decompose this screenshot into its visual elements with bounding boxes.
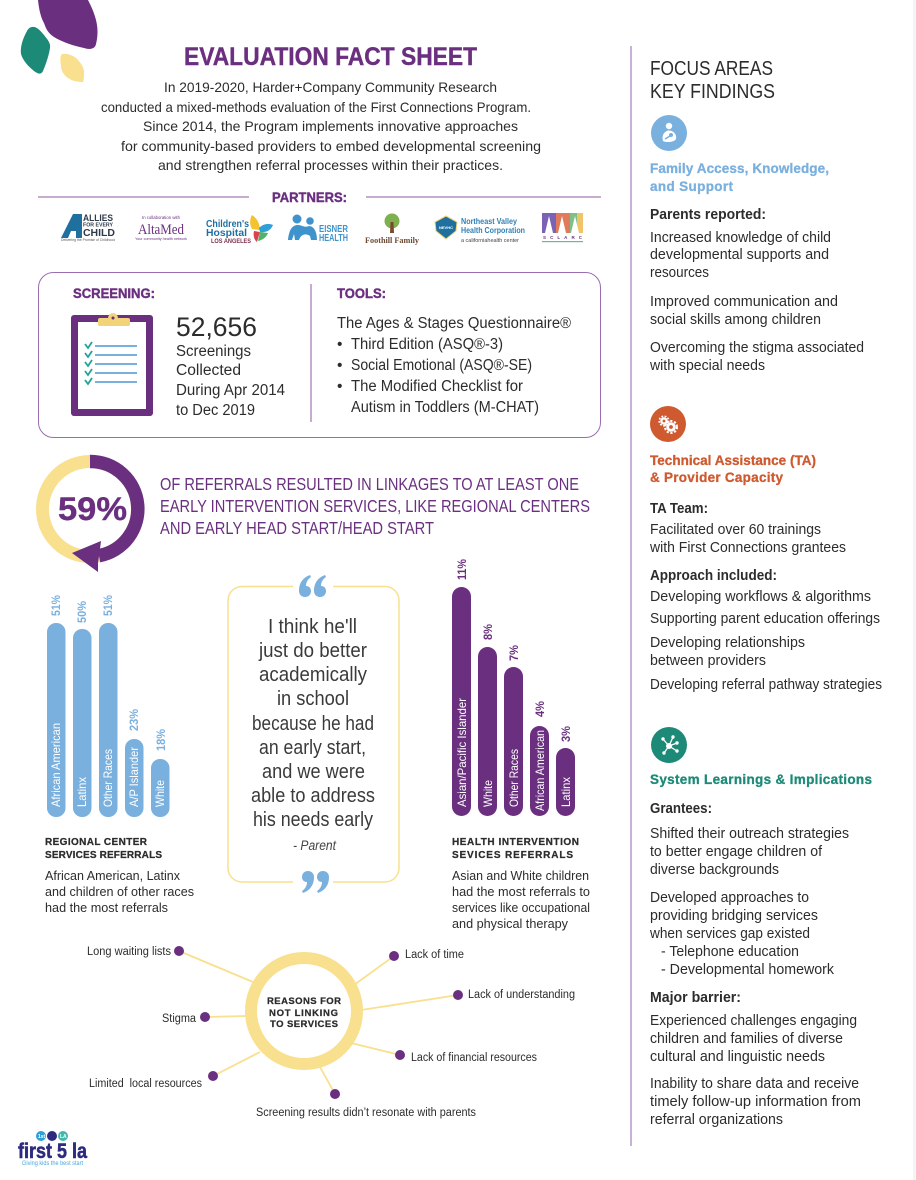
donut chart: 59%: 59% <box>58 491 127 527</box>
referral linkage statement <box>160 474 590 538</box>
screening count <box>176 312 285 419</box>
bar chart: regional center referrals: Other Races <box>101 749 115 807</box>
logo: Northeast Valley Health Corporation <box>435 216 525 244</box>
section: system learnings and implications: when services gap existed <box>649 926 810 942</box>
bar chart: regional center referrals: 18% <box>156 729 168 751</box>
section: family access, knowledge, and support: and Support <box>650 179 734 194</box>
heading: focus areas key findings <box>650 58 775 103</box>
section: technical assistance and provider capacity: Developing relationships <box>650 635 805 651</box>
logo: SCLARC <box>542 213 583 242</box>
logo: AltaMed: In collaboration with <box>142 215 180 220</box>
section: technical assistance and provider capacity: Facilitated over 60 trainings <box>650 522 821 538</box>
health intervention caption: SEVICES REFERRALS <box>452 850 573 861</box>
divider: right column <box>630 46 632 1146</box>
screening heading: SCREENING: <box>73 286 155 301</box>
section: technical assistance and provider capacity: Supporting parent education offerings <box>650 611 880 627</box>
callout: parent quote: - Parent <box>293 838 337 853</box>
section: system learnings and implications: Grantees: <box>650 801 712 817</box>
diagram: reasons for not linking to services: TO SERVICES <box>270 1019 338 1030</box>
logo: Foothill Family: Foothill Family <box>365 235 420 245</box>
bar chart: regional center referrals: Latinx <box>75 777 89 807</box>
health intervention caption: had the most referrals to <box>452 884 590 899</box>
bar chart: health intervention referrals <box>452 559 575 816</box>
screening count: Screenings <box>176 343 251 360</box>
section: technical assistance and provider capacity: Developing workflows & algorithms <box>650 589 871 605</box>
callout: parent quote: able to address <box>251 785 375 807</box>
callout: parent quote: and we were <box>262 761 365 783</box>
section: system learnings and implications: Shifted their outreach strategies <box>650 826 849 842</box>
section: system learnings and implications: diverse backgrounds <box>650 862 779 878</box>
section: system learnings and implications: Experienced challenges engaging <box>650 1013 857 1029</box>
bar chart: health intervention referrals: Other Races <box>507 749 521 807</box>
logo: First 5 LA: LA <box>60 1134 67 1140</box>
screening count: Collected <box>176 362 241 379</box>
logo: First 5 LA: first 5 la <box>18 1140 87 1163</box>
diagram: reasons for not linking to services: Long waiting lists <box>87 946 171 958</box>
logo: Children's Hospital Los Angeles <box>206 215 273 245</box>
diagram: reasons for not linking to services: Screening results didn’t resonate with parents <box>256 1107 476 1119</box>
regional center caption <box>45 837 194 915</box>
section: technical assistance and provider capacity: Technical Assistance (TA) <box>650 453 816 468</box>
logo: First 5 LA <box>18 1131 87 1167</box>
referral linkage statement: AND EARLY HEAD START/HEAD START <box>160 518 434 538</box>
bar chart: regional center referrals: 50% <box>77 601 89 623</box>
diagram: reasons for not linking to services: Limited local resources <box>89 1078 202 1090</box>
tools list: • <box>337 357 342 374</box>
bar chart: health intervention referrals: 11% <box>457 559 469 580</box>
regional center caption: had the most referrals <box>45 900 168 915</box>
referral linkage statement: EARLY INTERVENTION SERVICES, LIKE REGIONAL CENTERS <box>160 496 590 516</box>
section: system learnings and implications: - Developmental homework <box>661 962 835 978</box>
section: family access, knowledge, and support: Increased knowledge of child <box>650 230 831 246</box>
intro paragraph: Since 2014, the Program implements innovative approaches <box>143 118 518 134</box>
icon: gears <box>650 406 686 442</box>
logo: AltaMed: Your community health network <box>135 236 187 241</box>
section: technical assistance and provider capacity: TA Team: <box>650 501 708 517</box>
bar chart: health intervention referrals: Asian/Pacific Islander <box>455 698 469 807</box>
intro paragraph <box>101 79 541 173</box>
screening count: to Dec 2019 <box>176 402 255 419</box>
section: system learnings and implications: Major barrier: <box>650 990 741 1006</box>
decorative leaves logo <box>21 0 98 82</box>
intro paragraph: for community-based providers to embed developmental screening <box>121 138 541 154</box>
referral linkage statement: OF REFERRALS RESULTED IN LINKAGES TO AT LEAST ONE <box>160 474 579 494</box>
tools list: Autism in Toddlers (M-CHAT) <box>351 399 539 416</box>
intro paragraph: In 2019-2020, Harder+Company Community Research <box>164 79 497 95</box>
section: technical assistance and provider capacity: Developing referral pathway strategies <box>650 677 882 693</box>
callout: parent quote: just do better <box>258 640 367 662</box>
bar chart: health intervention referrals: 3% <box>561 726 573 742</box>
bar chart: regional center referrals: White <box>153 780 167 807</box>
bar chart: regional center referrals: 51% <box>51 595 63 616</box>
logo: Children's Hospital Los Angeles: Children's <box>206 219 249 230</box>
icon: closing quote mark <box>302 871 329 893</box>
health intervention caption: services like occupational <box>452 900 590 915</box>
tools list: • <box>337 336 342 353</box>
regional center caption: REGIONAL CENTER <box>45 837 148 848</box>
tools list: The Ages & Stages Questionnaire® <box>337 315 572 332</box>
icon: network <box>651 727 687 763</box>
section: system learnings and implications: cultural and linguistic needs <box>650 1049 825 1065</box>
section: technical assistance and provider capacity: between providers <box>650 653 766 669</box>
panel: screening and tools <box>38 272 600 438</box>
tools heading: TOOLS: <box>337 286 386 301</box>
tools list: • <box>337 378 342 395</box>
logo: Allies for Every Child: ALLIES <box>83 213 113 223</box>
logo: Eisner Health: EISNER <box>319 224 349 235</box>
icon: family access <box>651 115 687 151</box>
bar chart: health intervention referrals: 4% <box>535 701 547 717</box>
tools list <box>337 315 572 416</box>
title: EVALUATION FACT SHEET <box>184 43 477 71</box>
section: family access, knowledge, and support: with special needs <box>649 358 765 374</box>
logo: Eisner Health: HEALTH <box>319 233 348 244</box>
bar chart: regional center referrals: 23% <box>129 709 141 731</box>
section: system learnings and implications: Inability to share data and receive <box>650 1076 859 1092</box>
section: family access, knowledge, and support: Parents reported: <box>650 207 766 223</box>
section: system learnings and implications: referral organizations <box>650 1112 783 1128</box>
callout: parent quote: in school <box>277 688 349 710</box>
section: technical assistance and provider capacity: Approach included: <box>650 568 777 584</box>
logo: Children's Hospital Los Angeles: LOS ANGELES <box>211 238 252 245</box>
callout: parent quote: an early start, <box>259 737 366 759</box>
logo: Northeast Valley Health Corporation: NEVHC <box>439 225 453 230</box>
section: technical assistance and provider capacity <box>649 453 882 693</box>
logo: Allies for Every Child: CHILD <box>83 227 115 239</box>
bar chart: regional center referrals <box>47 595 170 817</box>
callout: parent quote <box>228 575 399 893</box>
logo: Eisner Health <box>288 214 349 244</box>
section: family access, knowledge, and support: Overcoming the stigma associated <box>650 340 864 356</box>
logo: SCLARC: SCLARC <box>543 235 583 240</box>
diagram: reasons for not linking to services: Lack of understanding <box>468 989 575 1001</box>
bar chart: health intervention referrals: African American <box>533 730 547 811</box>
diagram: reasons for not linking to services: REASONS FOR <box>267 996 341 1007</box>
regional center caption: African American, Latinx <box>45 868 180 883</box>
tools list: The Modified Checklist for <box>351 378 523 395</box>
logo: Foothill Family <box>365 214 420 245</box>
logo: First 5 LA: Giving kids the best start <box>22 1160 83 1167</box>
screening count: 52,656 <box>176 312 257 342</box>
section: family access, knowledge, and support: developmental supports and <box>650 247 829 263</box>
bar chart: health intervention referrals: 7% <box>509 645 521 661</box>
section: family access, knowledge, and support: social skills among children <box>650 312 821 328</box>
intro paragraph: and strengthen referral processes within their practices. <box>158 157 503 173</box>
health intervention caption: HEALTH INTERVENTION <box>452 837 579 848</box>
health intervention caption: Asian and White children <box>452 868 589 883</box>
bar chart: health intervention referrals: Latinx <box>559 777 573 807</box>
logo: Children's Hospital Los Angeles: Hospital <box>206 228 247 239</box>
section: family access, knowledge, and support: Family Access, Knowledge, <box>650 161 829 176</box>
heading: focus areas key findings: FOCUS AREAS <box>650 58 773 80</box>
section: system learnings and implications: children and families of diverse <box>650 1031 843 1047</box>
logo: AltaMed <box>135 215 187 241</box>
logo: Northeast Valley Health Corporation: a californiahealth center <box>461 238 519 244</box>
section: family access, knowledge, and support: Improved communication and <box>650 294 838 310</box>
regional center caption: SERVICES REFERRALS <box>45 850 162 861</box>
section: family access, knowledge, and support: resources <box>650 265 709 281</box>
logo: Allies for Every Child: FOR EVERY <box>83 222 114 228</box>
icon: opening quote mark <box>299 575 326 597</box>
section: family access, knowledge, and support <box>649 161 864 374</box>
diagram: reasons for not linking to services <box>87 946 575 1119</box>
section: technical assistance and provider capacity: with First Connections grantees <box>649 540 846 556</box>
logo: Allies for Every Child: Delivering the Promise of Childhood <box>61 238 115 242</box>
tools list: Third Edition (ASQ®-3) <box>351 336 503 353</box>
donut chart: 59% <box>42 461 138 572</box>
diagram: reasons for not linking to services: Lack of time <box>405 949 464 961</box>
heading: focus areas key findings: KEY FINDINGS <box>650 81 775 103</box>
bar chart: regional center referrals: A/P Islander <box>127 747 141 807</box>
callout: parent quote: because he had <box>252 713 374 735</box>
bar chart: health intervention referrals: 8% <box>483 624 495 640</box>
section: system learnings and implications: System Learnings & Implications <box>650 772 872 787</box>
regional center caption: and children of other races <box>45 884 194 899</box>
logo: Northeast Valley Health Corporation: Northeast Valley <box>461 217 517 226</box>
logo: Northeast Valley Health Corporation: Health Corporation <box>461 226 525 235</box>
diagram: reasons for not linking to services: Lack of financial resources <box>411 1052 537 1064</box>
logo: Allies for Every Child <box>61 213 115 242</box>
logo: AltaMed: AltaMed <box>138 222 185 238</box>
health intervention caption: and physical therapy <box>452 916 568 931</box>
callout: parent quote: I think he'll <box>268 616 357 638</box>
bar chart: regional center referrals: African American <box>49 723 63 807</box>
screening count: During Apr 2014 <box>176 382 285 399</box>
icon: clipboard <box>71 313 153 416</box>
section: system learnings and implications: to better engage children of <box>650 844 823 860</box>
health intervention caption <box>452 837 590 931</box>
section: technical assistance and provider capacity: & Provider Capacity <box>650 470 783 485</box>
callout: parent quote: academically <box>259 664 367 686</box>
intro paragraph: conducted a mixed-methods evaluation of the First Connections Program. <box>101 99 531 115</box>
logo: First 5 LA: 1st <box>38 1134 46 1140</box>
tools list: Social Emotional (ASQ®-SE) <box>351 357 532 374</box>
callout: parent quote: his needs early <box>253 809 373 831</box>
section: system learnings and implications: - Telephone education <box>661 944 799 960</box>
section: system learnings and implications: providing bridging services <box>650 908 818 924</box>
section: system learnings and implications: timely follow-up information from <box>650 1094 861 1110</box>
section: system learnings and implications: Developed approaches to <box>650 890 809 906</box>
diagram: reasons for not linking to services: NOT LINKING <box>269 1008 338 1019</box>
section: system learnings and implications <box>649 772 872 1128</box>
bar chart: health intervention referrals: White <box>481 780 495 807</box>
bar chart: regional center referrals: 51% <box>103 595 115 616</box>
partners heading: PARTNERS: <box>272 189 347 205</box>
partner logos <box>61 213 583 245</box>
diagram: reasons for not linking to services: Stigma <box>162 1013 197 1025</box>
